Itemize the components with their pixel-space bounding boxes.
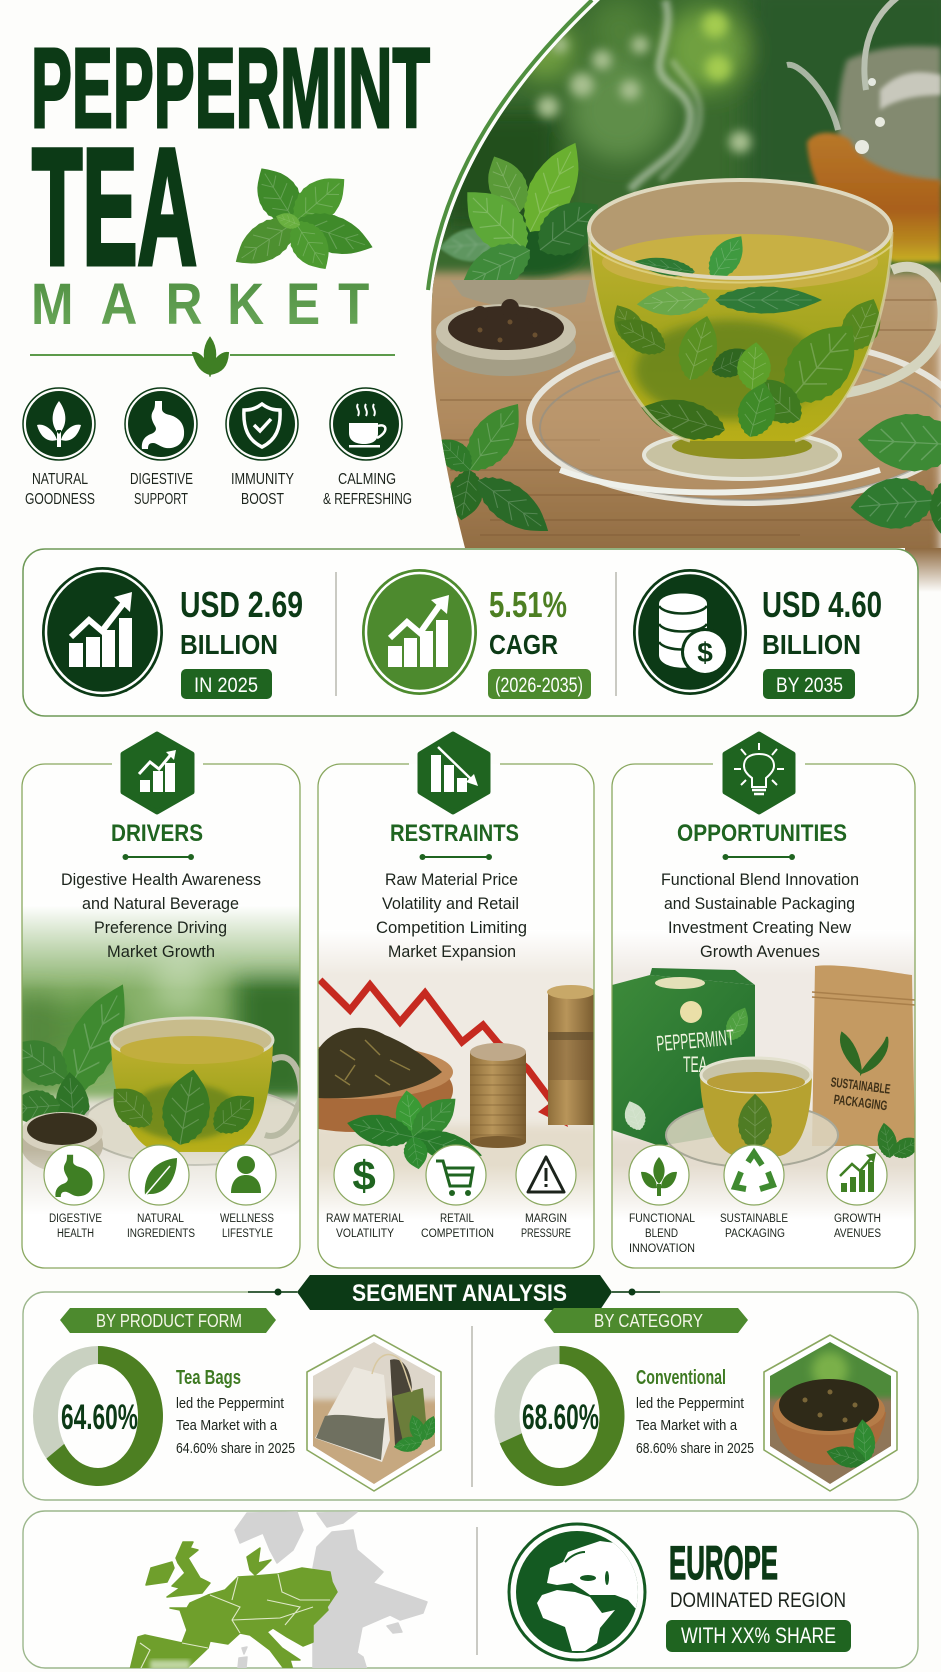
- restraints description: Competition Limiting: [376, 919, 527, 937]
- icon row: growth avenues: AVENUES: [834, 1226, 881, 1240]
- icon row: natural ingredients: [127, 1145, 195, 1240]
- restraints description: Volatility and Retail: [382, 895, 519, 913]
- icon row: raw material volatility: [326, 1145, 404, 1240]
- benefit: digestive support: SUPPORT: [134, 491, 188, 508]
- benefit: immunity boost: [226, 388, 298, 508]
- opportunities photo: tea box and kraft pouch: TEA: [683, 1052, 707, 1077]
- drivers description: [61, 871, 261, 961]
- title: TEA: [32, 115, 197, 300]
- icon row: growth avenues: GROWTH: [834, 1211, 881, 1225]
- text: tea bags: 64.60% share in 2025: [176, 1440, 295, 1457]
- icon row: digestive health: [44, 1145, 104, 1240]
- icon: mint sprig: [225, 158, 378, 279]
- opportunities description: Functional Blend Innovation: [661, 871, 859, 889]
- icon row: wellness lifestyle: LIFESTYLE: [222, 1226, 273, 1240]
- icon: falling chart hexagon: [420, 734, 488, 812]
- icon row: wellness lifestyle: [216, 1145, 276, 1240]
- restraints description: [376, 871, 527, 961]
- donut: 68.60%: 68.60%: [522, 1398, 599, 1437]
- icon row: digestive health: DIGESTIVE: [49, 1211, 102, 1225]
- icon: globe: [509, 1524, 660, 1660]
- benefit: calming and refreshing: CALMING: [338, 471, 396, 488]
- saucer: [529, 337, 941, 503]
- opportunities description: Growth Avenues: [700, 943, 820, 961]
- opportunities description: Investment Creating New: [668, 919, 851, 937]
- icon row: retail competition: COMPETITION: [421, 1226, 494, 1240]
- icon row: sustainable packaging: SUSTAINABLE: [720, 1211, 788, 1225]
- heading: drivers: DRIVERS: [111, 820, 203, 847]
- benefit: natural goodness: NATURAL: [32, 471, 88, 488]
- stat: market size 2025: [42, 567, 303, 699]
- drivers photo: tea cup and mint: [22, 911, 300, 1198]
- foreground mint right: [850, 414, 941, 534]
- badge: share: [666, 1620, 851, 1652]
- stat: forecast value 2035: $: [697, 637, 713, 668]
- icon row: margin pressure: [516, 1145, 576, 1240]
- drivers description: Market Growth: [107, 943, 215, 961]
- icon: rising chart hexagon: [123, 734, 192, 812]
- text: tea bags: [176, 1367, 295, 1457]
- text: conventional: Conventional: [636, 1367, 726, 1389]
- heading: opportunities: OPPORTUNITIES: [677, 820, 847, 847]
- opportunities photo: tea box and kraft pouch: PEPPERMINT: [655, 1025, 735, 1056]
- title: PEPPERMINT: [31, 25, 430, 151]
- heading divider: [122, 854, 194, 860]
- stat: market size 2025: IN 2025: [194, 674, 258, 697]
- benefit: natural goodness: [23, 388, 95, 508]
- icon row: raw material volatility: RAW MATERIAL: [326, 1211, 404, 1225]
- text: tea bags: led the Peppermint: [176, 1395, 285, 1412]
- icon row: wellness lifestyle: WELLNESS: [220, 1211, 274, 1225]
- donut: 64.60%: [33, 1346, 163, 1486]
- restraints description: Market Expansion: [388, 943, 516, 961]
- text: conventional: led the Peppermint: [636, 1395, 745, 1412]
- stat: CAGR: [362, 569, 591, 699]
- icon row: margin pressure: PRESSURE: [521, 1226, 571, 1240]
- icon row: growth avenues: [827, 1145, 887, 1240]
- teapot: [787, 0, 941, 262]
- icon row: retail competition: RETAIL: [440, 1211, 474, 1225]
- icon row: raw material volatility: $: [352, 1152, 376, 1199]
- icon row: functional blend innovation: BLEND: [645, 1226, 678, 1240]
- back plants: [440, 143, 598, 280]
- stat: forecast value 2035: [633, 569, 882, 699]
- icon row: sustainable packaging: PACKAGING: [725, 1226, 785, 1240]
- heading: restraints: RESTRAINTS: [390, 820, 519, 847]
- wood table: [420, 272, 941, 562]
- stat: market size 2025: USD 2.69: [180, 584, 303, 625]
- icon row: digestive health: HEALTH: [57, 1226, 94, 1240]
- stat: CAGR: (2026-2035): [495, 674, 583, 697]
- title: [31, 25, 430, 337]
- stat: CAGR: 5.51%: [489, 584, 567, 625]
- icon row: sustainable packaging: [720, 1145, 788, 1240]
- text: tea bags: Tea Bags: [176, 1367, 241, 1389]
- divider with leaf: [30, 338, 395, 374]
- drivers description: and Natural Beverage: [82, 895, 239, 913]
- panel: key market numbers: [23, 549, 918, 716]
- opportunities photo: tea box and kraft pouch: [612, 947, 914, 1208]
- segment: by category: BY CATEGORY: [594, 1311, 703, 1331]
- segment: by product form: BY PRODUCT FORM: [96, 1311, 242, 1331]
- text: conventional: [636, 1367, 754, 1457]
- icon row: natural ingredients: NATURAL: [137, 1211, 184, 1225]
- panel: drivers: [21, 732, 301, 1269]
- segment: by product form: [33, 1308, 445, 1495]
- photo fade at right edge: [905, 548, 941, 592]
- photo curve accent: [428, 0, 592, 290]
- benefit: immunity boost: BOOST: [241, 491, 284, 508]
- icon row: raw material volatility: VOLATILITY: [336, 1226, 394, 1240]
- heading divider: [420, 854, 492, 860]
- heading divider: [722, 854, 795, 860]
- opportunities photo: tea box and kraft pouch: SUSTAINABLE: [830, 1074, 891, 1097]
- hero photo: peppermint tea cup: [420, 0, 941, 562]
- icon: light bulb hexagon: [725, 734, 793, 812]
- text: conventional: Tea Market with a: [636, 1417, 738, 1434]
- stat: forecast value 2035: BY 2035: [776, 674, 843, 697]
- donut: 68.60%: [494, 1346, 625, 1486]
- cup: [589, 180, 941, 479]
- segment: by category: [494, 1308, 905, 1493]
- banner: segment analysis: [248, 1275, 660, 1310]
- map of europe: [130, 1512, 427, 1670]
- benefit: calming and refreshing: & REFRESHING: [323, 491, 412, 508]
- panel: opportunities: [605, 734, 925, 1275]
- stat: forecast value 2035: BILLION: [762, 629, 861, 660]
- image: tea bag hexagon: [305, 1335, 445, 1495]
- image: loose tea bowl hexagon: [760, 1335, 905, 1493]
- icon row: functional blend innovation: INNOVATION: [629, 1241, 695, 1255]
- icon row: functional blend innovation: FUNCTIONAL: [629, 1211, 695, 1225]
- icon row: retail competition: [421, 1145, 494, 1240]
- stat: market size 2025: BILLION: [180, 629, 278, 660]
- panel: segment analysis: [23, 1275, 918, 1500]
- restraints description: Raw Material Price: [385, 871, 518, 889]
- opportunities description: [661, 871, 859, 961]
- panel: restraints: [317, 732, 595, 1269]
- label: dominated region: DOMINATED REGION: [670, 1589, 846, 1612]
- benefit: immunity boost: IMMUNITY: [231, 471, 294, 488]
- drivers description: Digestive Health Awareness: [61, 871, 261, 889]
- benefit: natural goodness: GOODNESS: [25, 491, 95, 508]
- opportunities description: and Sustainable Packaging: [664, 895, 855, 913]
- stat: forecast value 2035: USD 4.60: [762, 584, 882, 625]
- text: conventional: 68.60% share in 2025: [636, 1440, 754, 1457]
- drivers description: Preference Driving: [94, 919, 227, 937]
- benefit: digestive support: DIGESTIVE: [130, 471, 193, 488]
- panel: regional leader: [23, 1511, 918, 1670]
- benefit: calming and refreshing: [323, 388, 412, 508]
- heading: europe: EUROPE: [669, 1536, 778, 1589]
- icon row: margin pressure: MARGIN: [525, 1211, 567, 1225]
- donut: 64.60%: 64.60%: [61, 1398, 138, 1437]
- restraints photo: falling arrow and coins: [318, 946, 594, 1210]
- icon row: natural ingredients: INGREDIENTS: [127, 1226, 195, 1240]
- stat: CAGR: CAGR: [489, 629, 558, 660]
- title: MARKET: [31, 272, 369, 337]
- foreground mint left: [442, 404, 548, 531]
- badge: share: WITH XX% SHARE: [681, 1623, 836, 1648]
- small bowl of tea leaves: [436, 299, 576, 376]
- opportunities photo: tea box and kraft pouch: PACKAGING: [833, 1092, 888, 1113]
- banner: segment analysis: SEGMENT ANALYSIS: [352, 1280, 567, 1307]
- steam: [630, 0, 700, 190]
- icon row: functional blend innovation: [629, 1145, 695, 1255]
- benefit: digestive support: [125, 388, 197, 508]
- text: tea bags: Tea Market with a: [176, 1417, 278, 1434]
